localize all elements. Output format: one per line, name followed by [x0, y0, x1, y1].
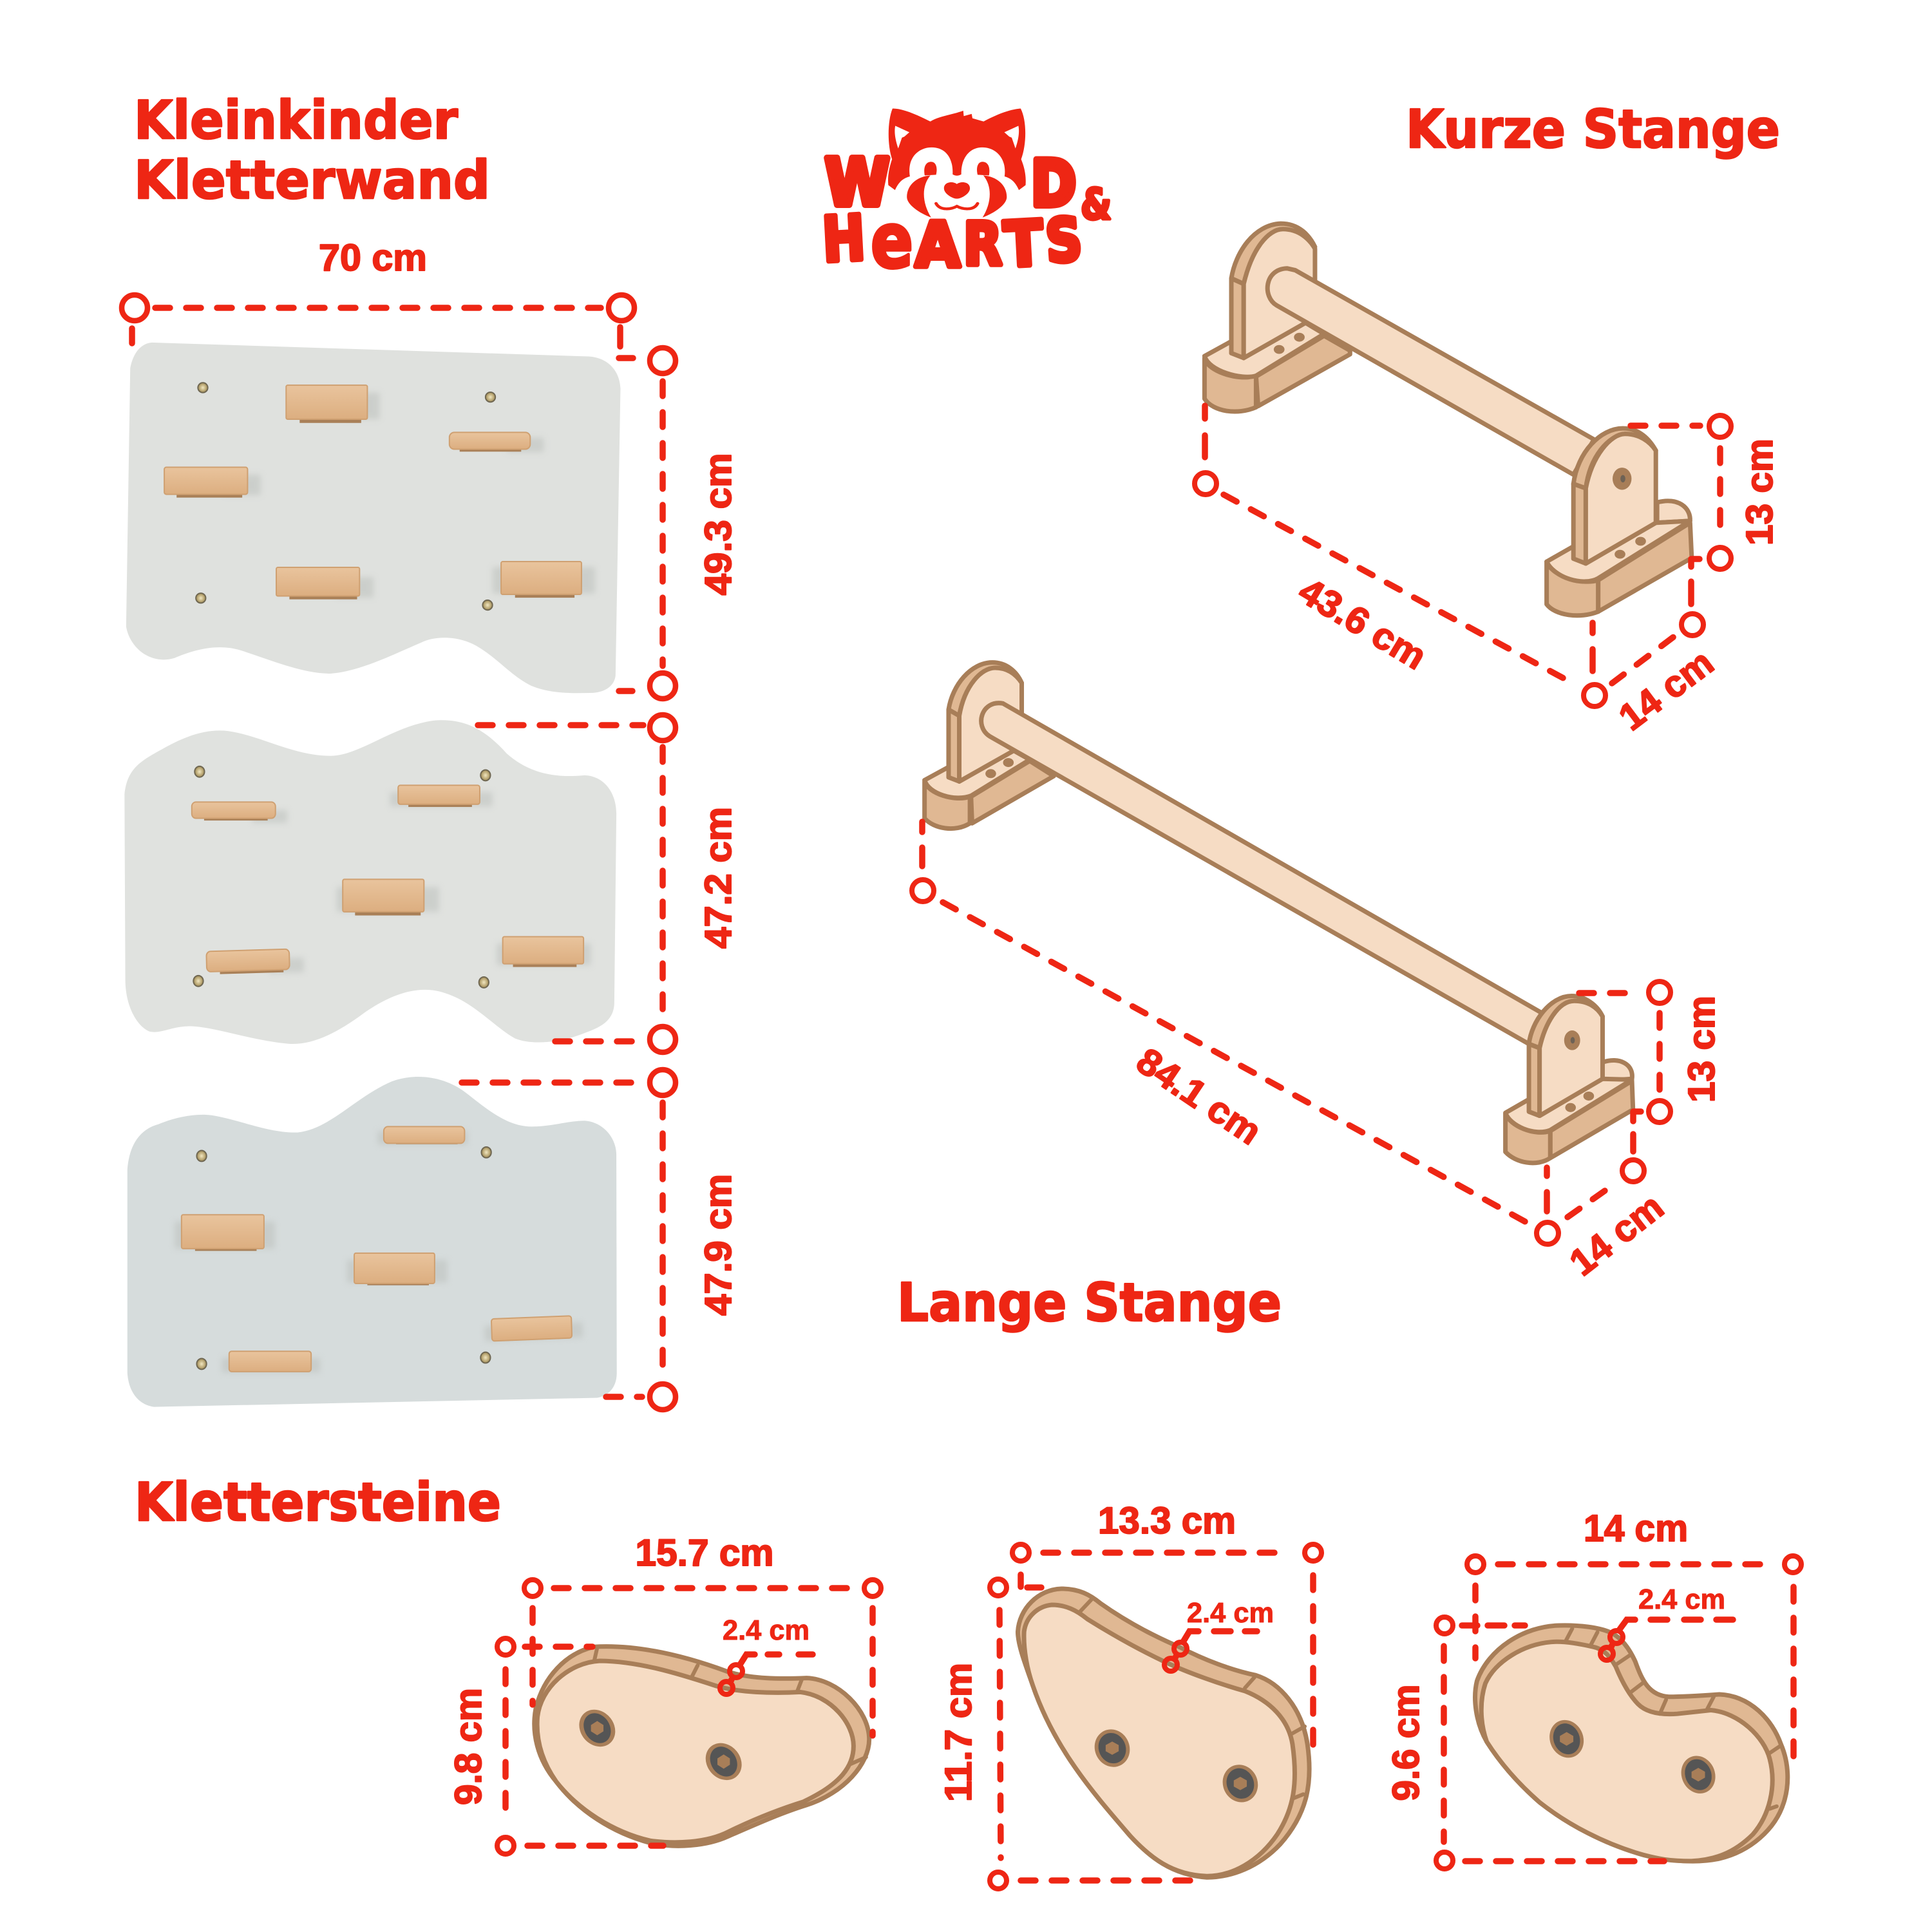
- dimension: stone 1 thickness 2.4 cm: [720, 1615, 813, 1694]
- dimension: long bar depth 14 cm: 14 cm: [1562, 1186, 1671, 1284]
- dimension: short bar height 13 cm: [1631, 415, 1781, 569]
- bar: [981, 703, 1542, 1044]
- wood hold: [450, 432, 544, 452]
- dimension: stone 3 height 9.6 cm: [1385, 1617, 1664, 1869]
- dimension: wall width 70 cm: 70 cm: [319, 237, 427, 279]
- logo text: HEARTS: H: [820, 202, 867, 276]
- logo text: HEARTS: R: [963, 210, 1002, 279]
- dimension: stone 2 width 13.3 cm: [1012, 1500, 1321, 1752]
- left upright: [1231, 223, 1315, 358]
- dimension: stone 2 width 13.3 cm: 13.3 cm: [1098, 1500, 1236, 1542]
- dimension: short bar depth 14 cm: [1593, 559, 1721, 739]
- wood hold: [206, 949, 304, 975]
- dimension: wall height 47.2 cm: 47.2 cm: [697, 807, 739, 949]
- dimension: long bar length 84.1 cm: [912, 822, 1558, 1244]
- bolt: [1090, 1726, 1134, 1771]
- screws: [193, 766, 491, 988]
- wood hold: [493, 562, 595, 598]
- logo text: W: W: [825, 145, 889, 220]
- wood hold: [286, 385, 380, 423]
- right upright: [1573, 428, 1656, 564]
- wood hold: [497, 937, 591, 967]
- dimension: short bar height 13 cm: 13 cm: [1739, 439, 1781, 545]
- bolt: [574, 1707, 620, 1749]
- dimension: stone 3 width 14 cm: 14 cm: [1584, 1508, 1688, 1549]
- wood hold: [337, 879, 439, 916]
- dimension: stone 1 width 15.7 cm: [524, 1532, 881, 1736]
- logo text: HEARTS: [820, 196, 1084, 285]
- logo text: ampersand: &: [1081, 180, 1112, 229]
- dimension: stone 1 height 9.8 cm: 9.8 cm: [448, 1688, 489, 1805]
- dimension: wall height 47.2 cm: [478, 715, 739, 1052]
- dimension: wall height 49.3 cm: 49.3 cm: [697, 453, 739, 595]
- bolt: [1546, 1718, 1587, 1761]
- dimension: short bar length 43.6 cm: 43.6 cm: [1292, 569, 1434, 677]
- dimension: stone 2 height 11.7 cm: [938, 1579, 1195, 1889]
- logo text: HEARTS: A: [915, 209, 960, 281]
- screws: [196, 383, 495, 610]
- bolt: [1218, 1761, 1262, 1806]
- dimension: short bar depth 14 cm: 14 cm: [1611, 641, 1721, 739]
- dimension: stone 2 height 11.7 cm: 11.7 cm: [938, 1663, 980, 1802]
- right base: [1547, 501, 1692, 616]
- screws: [196, 1147, 491, 1369]
- wood hold: [276, 567, 374, 600]
- wall board 1: [126, 343, 620, 693]
- dimension: stone 1 height 9.8 cm: [448, 1638, 663, 1854]
- dimension: stone 3 width 14 cm: [1467, 1508, 1801, 1758]
- right base: [1506, 1061, 1633, 1163]
- wood hold: [377, 1126, 468, 1144]
- title: Klettersteine: Klettersteine: [135, 1472, 501, 1533]
- climbing stone 1: [535, 1647, 869, 1846]
- bolt: [701, 1741, 746, 1783]
- logo: Wood & Hearts red panda: [820, 109, 1112, 285]
- dimension: stone 2 thickness 2.4 cm: [1164, 1597, 1274, 1671]
- left base: [1204, 323, 1350, 412]
- climbing stone 2: [1018, 1589, 1309, 1877]
- logo icon: red panda head: [888, 109, 1026, 218]
- illustration: short bar: [1204, 223, 1692, 616]
- dimension: wall height 49.3 cm: [619, 348, 739, 699]
- panel: climbing wall middle: [124, 720, 616, 1044]
- left base: [925, 751, 1054, 829]
- wood hold: [222, 1351, 320, 1372]
- wood hold: [175, 1215, 275, 1251]
- dimension: stone 1 thickness 2.4 cm: 2.4 cm: [723, 1615, 810, 1646]
- dimension: stone 2 thickness 2.4 cm: 2.4 cm: [1187, 1597, 1274, 1629]
- dimension: stone 3 thickness 2.4 cm: [1600, 1584, 1733, 1660]
- panel: climbing wall bottom: [128, 1077, 617, 1407]
- climbing stone 3: [1475, 1625, 1788, 1861]
- title: Kleinkinder Kletterwand: Kleinkinder: [134, 90, 459, 151]
- wall board 2: [124, 720, 616, 1044]
- panel: climbing wall top: [126, 343, 620, 693]
- title: Kurze Stange: Kurze Stange: [1406, 99, 1780, 160]
- title: Lange Stange: Lange Stange: [897, 1273, 1282, 1334]
- left upright: [949, 663, 1022, 781]
- bar: [1267, 269, 1594, 475]
- dimension: short bar length 43.6 cm: [1195, 406, 1605, 706]
- title: Kleinkinder Kletterwand: [134, 90, 490, 211]
- logo text: HEARTS: S: [1043, 205, 1084, 276]
- dimension: long bar length 84.1 cm: 84.1 cm: [1129, 1040, 1269, 1153]
- right upright: [1529, 996, 1602, 1116]
- wall board 3: [128, 1077, 617, 1407]
- wood hold: [484, 1316, 583, 1342]
- illustration: long bar: [925, 663, 1633, 1163]
- dimension: stone 3 height 9.6 cm: 9.6 cm: [1385, 1685, 1427, 1801]
- dimension: wall height 47.9 cm: 47.9 cm: [697, 1174, 739, 1316]
- dimension: long bar depth 14 cm: [1547, 1112, 1671, 1284]
- wood hold: [347, 1253, 448, 1285]
- wood hold: [390, 785, 493, 807]
- logo text: HEARTS: e: [871, 196, 913, 285]
- dimension: wall height 47.9 cm: [462, 1070, 739, 1410]
- dimension: wall width 70 cm: [122, 237, 634, 359]
- bolt: [1677, 1753, 1719, 1796]
- wood hold: [192, 802, 287, 823]
- title: Kleinkinder Kletterwand: Kletterwand: [134, 150, 490, 211]
- dimension: stone 1 width 15.7 cm: 15.7 cm: [635, 1532, 774, 1574]
- logo text: HEARTS: T: [1002, 207, 1045, 281]
- dimension: stone 3 thickness 2.4 cm: 2.4 cm: [1638, 1584, 1725, 1615]
- dimension: long bar height 13 cm: [1579, 981, 1723, 1122]
- dimension: long bar height 13 cm: 13 cm: [1681, 996, 1723, 1103]
- logo text: D: D: [1031, 147, 1076, 221]
- wood hold: [164, 468, 261, 498]
